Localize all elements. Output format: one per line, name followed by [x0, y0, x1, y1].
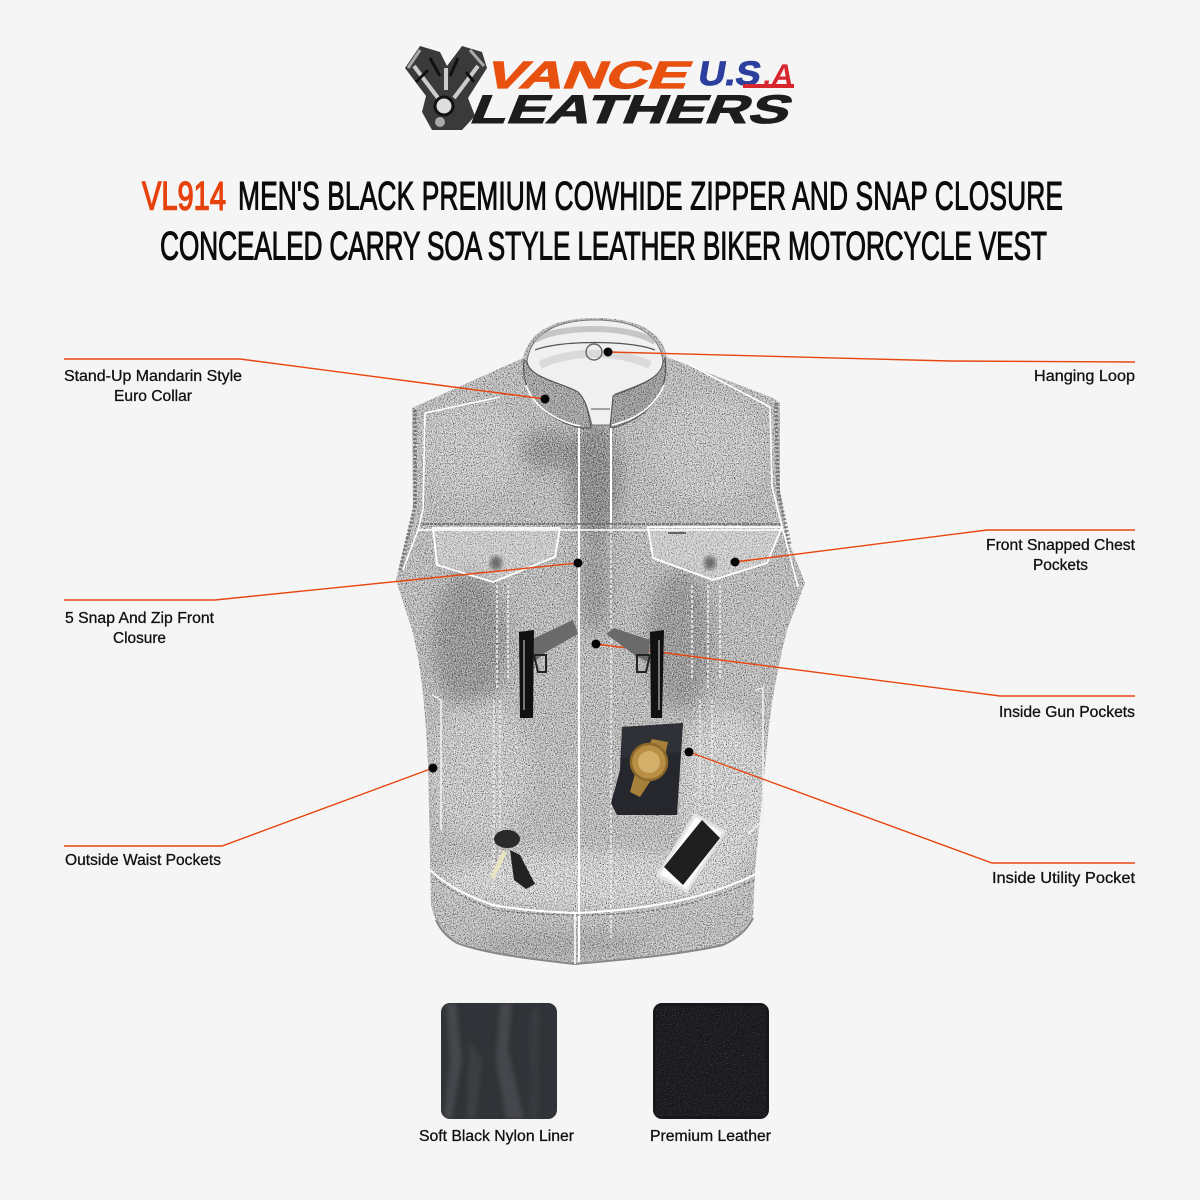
logo word: Vance: VANCE — [480, 54, 699, 97]
title: first line: MEN'S BLACK PREMIUM COWHIDE ZIPPER AND SNAP CLOSURE — [238, 174, 1063, 219]
logo — [405, 46, 801, 132]
icon: smartphone — [658, 815, 724, 891]
label: 5 Snap And Zip Front Closure: 5 Snap And Zip Front — [65, 610, 215, 627]
icon: concealed pistols — [519, 620, 664, 718]
icon: utility pouch with watch — [611, 723, 683, 815]
title: first line: VL914 — [142, 174, 226, 218]
label: Front Snapped Chest Pockets: Pockets — [1033, 557, 1088, 574]
icon: gold watch — [630, 739, 668, 797]
icon: right pistol — [606, 628, 664, 718]
seams and placket — [400, 365, 798, 962]
swatch: premium leather — [650, 1003, 771, 1145]
collar interior — [527, 320, 663, 425]
leader lines — [64, 352, 1135, 863]
label: Stand-Up Mandarin Style Euro Collar — [64, 368, 242, 405]
label: Front Snapped Chest Pockets: Front Snapped Chest — [986, 537, 1136, 554]
label: Front Snapped Chest Pockets — [986, 537, 1136, 574]
label: Stand-Up Mandarin Style Euro Collar: Stand-Up Mandarin Style — [64, 368, 242, 385]
label: 5 Snap And Zip Front Closure — [65, 610, 215, 647]
title: second line: CONCEALED CARRY SOA STYLE LEATHER BIKER MOTORCYCLE VEST — [160, 224, 1047, 269]
logo word: USA — [696, 55, 797, 93]
title — [142, 174, 1063, 269]
logo word: Leathers: LEATHERS — [465, 86, 801, 132]
logo word: USA: .A — [761, 59, 797, 92]
icon: car keys — [490, 830, 535, 889]
logo word: USA: U.S — [696, 55, 764, 93]
collar details — [535, 329, 655, 409]
swatch: nylon liner — [419, 1003, 574, 1145]
vest illustration — [390, 310, 810, 970]
label: Premium Leather: Premium Leather — [650, 1128, 771, 1145]
label: Soft Black Nylon Liner: Soft Black Nylon Liner — [419, 1128, 574, 1145]
shading under noise — [420, 395, 770, 957]
vest body — [390, 310, 810, 970]
icon: left pistol — [519, 620, 578, 718]
label: Stand-Up Mandarin Style Euro Collar: Euro Collar — [114, 388, 192, 405]
label: Hanging Loop: Hanging Loop — [1034, 368, 1135, 385]
icon: engine — [405, 46, 487, 130]
callout dots — [428, 348, 740, 772]
label: 5 Snap And Zip Front Closure: Closure — [113, 630, 166, 647]
chest pockets — [433, 527, 782, 582]
collar bands — [522, 356, 666, 428]
label: Inside Utility Pocket: Inside Utility Pocket — [992, 870, 1136, 887]
label: Outside Waist Pockets: Outside Waist Pockets — [65, 852, 221, 869]
waist pockets and hem band — [430, 688, 763, 964]
label: Inside Gun Pockets: Inside Gun Pockets — [999, 704, 1135, 721]
